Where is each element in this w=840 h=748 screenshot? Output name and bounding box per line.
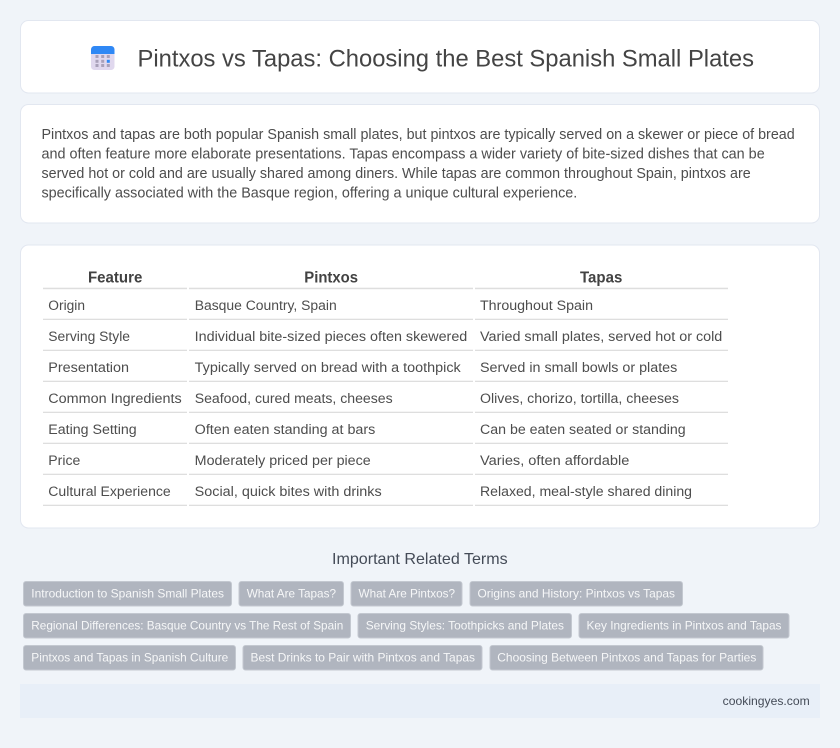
tag: key ingredients	[579, 614, 789, 638]
tag: serving styles	[358, 614, 572, 638]
tag: choosing between	[490, 646, 763, 670]
table row: presentation	[43, 360, 728, 382]
tag: introduction to spanish small plates	[24, 582, 232, 606]
text block: introduction paragraph: served hot or cold and are usually shared among diners. While tapas are common throughout Spain, pintxos are	[42, 166, 751, 182]
table row: cultural experience	[43, 484, 728, 506]
tag: best drinks: Best Drinks to Pair with Pintxos and Tapas	[250, 650, 475, 664]
table row: cultural experience: Social, quick bites with drinks	[195, 484, 382, 500]
table row: price	[43, 453, 728, 475]
tag: pintxos and tapas in spanish culture	[24, 646, 236, 670]
table row: presentation: Presentation	[48, 360, 129, 376]
text block: introduction paragraph: specifically associated with the Basque region, offering a unique cultural experience.	[42, 185, 577, 201]
panel: introduction	[20, 104, 820, 223]
table header row	[43, 270, 728, 289]
tag: choosing between: Choosing Between Pintxos and Tapas for Parties	[497, 650, 756, 664]
panel: header	[20, 20, 820, 93]
table row: price: Moderately priced per piece	[195, 453, 371, 469]
tag: what are tapas	[239, 582, 344, 606]
footer	[20, 684, 820, 718]
footer source credit: cookingyes.com	[723, 694, 810, 708]
table row: price: Price	[48, 453, 80, 469]
title: Pintxos vs Tapas: Choosing the Best Spanish Small Plates	[138, 46, 754, 73]
tag: regional differences	[24, 614, 350, 638]
icon: calendar	[91, 46, 114, 70]
table header row: Feature	[88, 270, 142, 287]
table row: price: Varies, often affordable	[480, 453, 629, 469]
table row: origin	[43, 298, 728, 320]
tag: regional differences: Regional Differences: Basque Country vs The Rest of Spain	[31, 618, 343, 632]
table row: serving style: Serving Style	[48, 329, 130, 345]
text block: introduction paragraph: Pintxos and tapas are both popular Spanish small plates, but pintxos are typically served on a skewer or piece of bread	[42, 127, 795, 143]
table row: cultural experience: Relaxed, meal-style shared dining	[480, 484, 692, 500]
table row: common ingredients	[43, 391, 728, 413]
heading: important related terms: Important Related Terms	[332, 551, 508, 568]
table row: eating setting: Eating Setting	[48, 422, 137, 438]
text block: introduction paragraph: and often feature more elaborate presentations. Tapas encompass a wider variety of bite-sized dishes that can be	[42, 146, 765, 162]
table row: serving style	[43, 329, 728, 351]
table row: serving style: Individual bite-sized pieces often skewered	[195, 329, 467, 345]
table row: origin: Basque Country, Spain	[195, 298, 337, 314]
table row: common ingredients: Seafood, cured meats, cheeses	[195, 391, 393, 407]
table row: presentation: Typically served on bread with a toothpick	[195, 360, 462, 376]
tag: key ingredients: Key Ingredients in Pintxos and Tapas	[586, 618, 782, 632]
table row: eating setting: Often eaten standing at bars	[195, 422, 375, 438]
panel: related terms	[24, 551, 789, 670]
text block: introduction paragraph	[42, 127, 795, 201]
tag: origins and history	[470, 582, 682, 606]
table row: serving style: Varied small plates, served hot or cold	[480, 329, 722, 345]
tag: pintxos and tapas in spanish culture: Pintxos and Tapas in Spanish Culture	[31, 650, 229, 664]
table row: common ingredients: Olives, chorizo, tortilla, cheeses	[480, 391, 679, 407]
table row: eating setting	[43, 422, 728, 444]
table header row: Pintxos	[304, 270, 358, 287]
table row: presentation: Served in small bowls or plates	[480, 360, 677, 376]
tag: what are pintxos	[351, 582, 462, 606]
table row: common ingredients: Common Ingredients	[48, 391, 182, 407]
tag: best drinks	[243, 646, 482, 670]
panel: comparison table	[20, 245, 820, 528]
tag: origins and history: Origins and History: Pintxos vs Tapas	[478, 586, 675, 600]
tag: what are tapas: What Are Tapas?	[247, 586, 336, 600]
tag: introduction to spanish small plates: Introduction to Spanish Small Plates	[31, 586, 224, 600]
tag: serving styles: Serving Styles: Toothpicks and Plates	[366, 618, 564, 632]
table row: eating setting: Can be eaten seated or standing	[480, 422, 686, 438]
table header row: Tapas	[580, 270, 622, 287]
table row: origin: Origin	[48, 298, 85, 314]
table row: cultural experience: Cultural Experience	[48, 484, 171, 500]
table row: origin: Throughout Spain	[480, 298, 593, 314]
tag: what are pintxos: What Are Pintxos?	[358, 586, 455, 600]
